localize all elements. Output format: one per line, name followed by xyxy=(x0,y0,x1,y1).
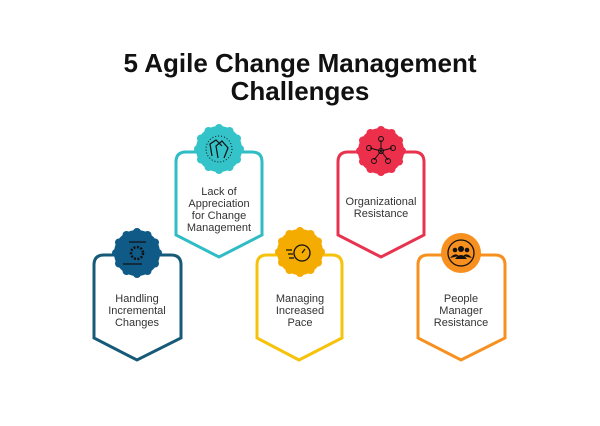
panel: Lack of Appreciation: Appreciation xyxy=(188,198,250,210)
panel: Handling Incremental Changes: Changes xyxy=(115,317,160,329)
icon: stopwatch badge xyxy=(275,227,325,277)
panel: Managing Increased Pace: Pace xyxy=(287,317,313,329)
panel: Managing Increased Pace: Increased xyxy=(276,305,324,317)
title: Challenges xyxy=(231,76,369,106)
panel: Organizational Resistance: Organizational xyxy=(346,196,416,208)
panel: Lack of Appreciation: Management xyxy=(187,222,251,234)
panel: Handling Incremental Changes xyxy=(94,228,181,360)
panel: Lack of Appreciation xyxy=(176,124,262,257)
panel: Organizational Resistance: Resistance xyxy=(354,208,408,220)
panel: People Manager Resistance: Resistance xyxy=(434,317,488,329)
icon: gear badge xyxy=(112,228,162,278)
panel: Lack of Appreciation: for Change xyxy=(192,210,246,222)
icon: people badge xyxy=(441,233,481,273)
panel: Lack of Appreciation: Lack of xyxy=(201,186,238,198)
title xyxy=(124,48,477,106)
icon: network badge xyxy=(356,126,406,176)
panel: People Manager Resistance: Manager xyxy=(439,305,483,317)
icon: clapping hands badge xyxy=(194,124,244,174)
panel: Managing Increased Pace: Managing xyxy=(276,293,324,305)
panel: Handling Incremental Changes: Incremental xyxy=(108,305,166,317)
title: 5 Agile Change Management xyxy=(124,48,477,78)
panel: Organizational Resistance xyxy=(338,126,424,257)
panel: Managing Increased Pace xyxy=(257,227,342,360)
panel: People Manager Resistance: People xyxy=(444,293,478,305)
panel: People Manager Resistance xyxy=(418,233,505,360)
panel: Handling Incremental Changes: Handling xyxy=(115,293,159,305)
